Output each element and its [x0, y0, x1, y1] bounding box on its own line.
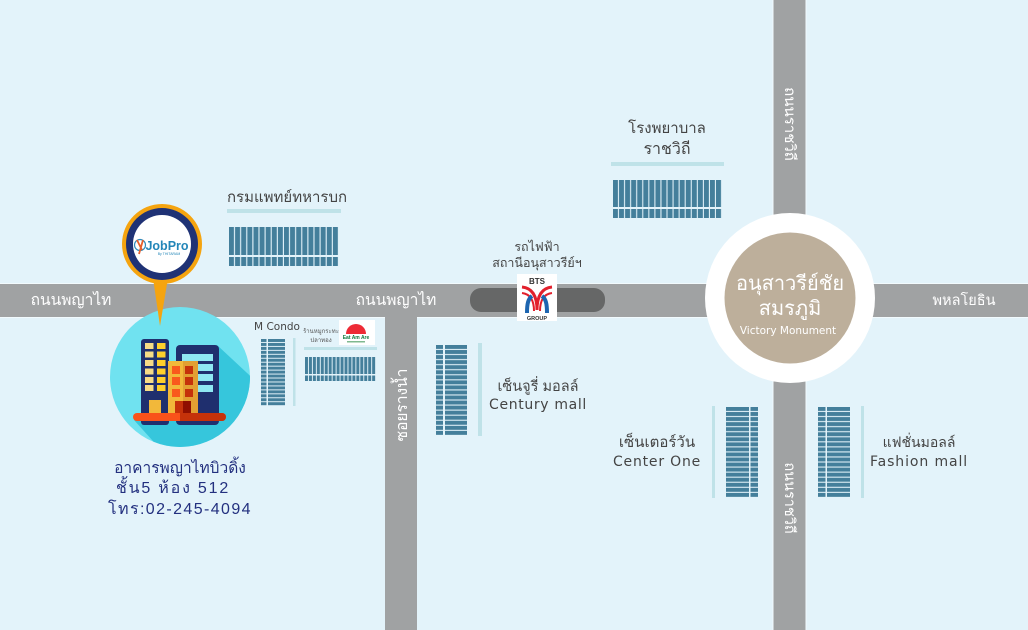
- logo: Eat Am Are: Eat Am Are: [343, 335, 370, 341]
- address block: [108, 456, 252, 518]
- icon: office buildings in circle: [110, 307, 250, 447]
- label English: Century mall: [489, 397, 587, 413]
- shop label: ร้านหมูกระทะ: [303, 328, 339, 335]
- JobPro mark: [134, 240, 146, 250]
- station label line 2: สถานีอนุสาวรีย์ฯ: [492, 256, 582, 271]
- label: ถนนพญาไท centre: ถนนพญาไท: [356, 291, 436, 309]
- address line 1: อาคารพญาไทบิวดิ้ง: [114, 456, 246, 477]
- building: กรมแพทย์ทหารบก: [227, 189, 347, 266]
- label English: Center One: [613, 454, 701, 470]
- shop label line 2: ปลาทอง: [310, 337, 332, 344]
- building: M Condo: [254, 321, 300, 406]
- heading: กรมแพทย์ทหารบก: [227, 189, 347, 206]
- building: โรงพยาบาลราชวิถี: [611, 119, 724, 218]
- BTS logo: GROUP: [527, 316, 547, 322]
- orange tower: [168, 361, 198, 415]
- building: เซ็นเตอร์วัน: [613, 406, 758, 498]
- label: พหลโยธิน: พหลโยธิน: [932, 291, 996, 309]
- address line 2: ชั้น5 ห้อง 512: [116, 476, 230, 497]
- BTS logo: BTS: [529, 277, 546, 286]
- road: ถนนราชวิถี vertical: [773, 0, 806, 630]
- victory monument roundabout: [705, 213, 875, 383]
- address line 3: โทร:02-245-4094: [108, 499, 252, 518]
- red base: [133, 413, 226, 421]
- label: ซอยรางน้ำ: ซอยรางน้ำ: [390, 369, 411, 441]
- heading line 2: ราชวิถี: [643, 140, 691, 158]
- label Thai: เซ็นเตอร์วัน: [619, 432, 695, 451]
- road: ซอยรางน้ำ vertical: [385, 317, 417, 630]
- label: ถนนราชวิถี south: ถนนราชวิถี: [781, 462, 798, 534]
- JobPro wordmark: JobPro: [145, 239, 189, 253]
- monument second line: สมรภูมิ: [759, 298, 821, 321]
- building: แฟชั่นมอลล์: [818, 406, 968, 498]
- road: ถนนพญาไท horizontal: [0, 284, 1028, 318]
- tall navy tower: [141, 339, 169, 425]
- station platform: [470, 288, 605, 312]
- monument Thai name: อนุสาวรีย์ชัย: [736, 272, 844, 296]
- station label: รถไฟฟ้า: [514, 240, 560, 254]
- monument English name: Victory Monument: [740, 325, 836, 337]
- building: ร้านหมูกระทะ: [303, 320, 377, 381]
- label Thai: เซ็นจูรี่ มอลล์: [497, 376, 579, 395]
- BTS station: [470, 240, 605, 322]
- JobPro tagline: By THITARAM: [158, 252, 180, 256]
- BTS logo: [517, 274, 557, 322]
- heading: M Condo: [254, 321, 300, 333]
- label: ถนนราชวิถี north: ถนนราชวิถี: [781, 87, 798, 161]
- label: ถนนพญาไท left: ถนนพญาไท: [31, 291, 111, 309]
- label English: Fashion mall: [870, 454, 968, 470]
- wide navy tower: [176, 345, 219, 425]
- building: เซ็นจูรี่ มอลล์: [436, 343, 587, 436]
- label Thai: แฟชั่นมอลล์: [883, 433, 955, 450]
- heading line 1: โรงพยาบาล: [628, 119, 706, 137]
- location pin: JobPro: [122, 204, 202, 326]
